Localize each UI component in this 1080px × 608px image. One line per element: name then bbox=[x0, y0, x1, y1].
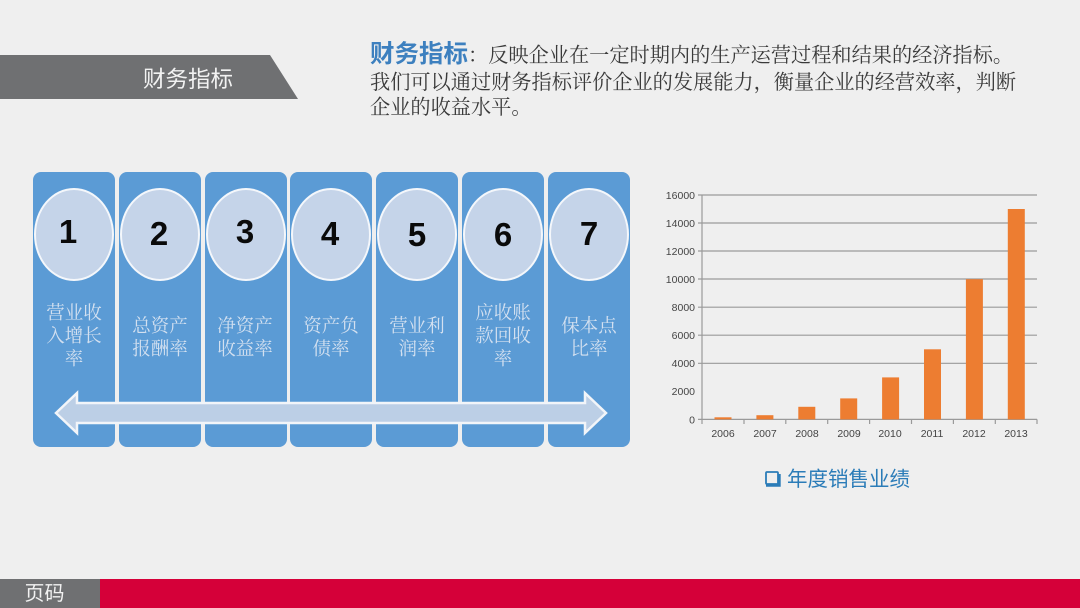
label 5: 营业利 bbox=[389, 317, 445, 337]
label 3 bbox=[217, 316, 273, 360]
icon: checkbox bullet bbox=[765, 471, 781, 487]
label 1 bbox=[46, 302, 102, 370]
bars bbox=[714, 209, 1025, 419]
footer bar bbox=[0, 579, 1080, 608]
y axis labels: 12000 bbox=[666, 246, 695, 258]
x axis labels: 2010 bbox=[878, 428, 902, 440]
label 7: 保本点 bbox=[561, 317, 617, 337]
number 6: 6 bbox=[494, 216, 512, 253]
number 4: 4 bbox=[321, 215, 339, 252]
circle 1 bbox=[34, 188, 114, 281]
x axis labels: 2009 bbox=[837, 428, 861, 440]
column 2 background bbox=[119, 172, 201, 447]
intro text block: 我们可以通过财务指标评价企业的发展能力，衡量企业的经营效率，判断 bbox=[370, 72, 1016, 94]
number 5: 5 bbox=[408, 216, 426, 253]
label 6: 应收账 bbox=[475, 304, 531, 324]
y axis labels: 2000 bbox=[672, 386, 695, 398]
y axis labels: 4000 bbox=[672, 358, 695, 370]
circle 2 bbox=[120, 188, 200, 281]
title banner bbox=[0, 55, 298, 99]
label 4: 债率 bbox=[312, 340, 350, 360]
label 6 bbox=[475, 302, 531, 370]
label 5: 润率 bbox=[398, 340, 436, 360]
column 4 background bbox=[290, 172, 372, 447]
panel: seven indicators bbox=[33, 172, 630, 447]
column 6 background bbox=[462, 172, 544, 447]
x axis labels: 2012 bbox=[962, 428, 986, 440]
label 1: 率 bbox=[65, 350, 83, 370]
y axis labels: 10000 bbox=[666, 274, 695, 286]
y axis labels bbox=[666, 190, 695, 426]
column 7 background bbox=[548, 172, 630, 447]
intro text block bbox=[370, 41, 1016, 119]
x axis labels: 2007 bbox=[753, 428, 777, 440]
number 2: 2 bbox=[150, 215, 168, 252]
x axis labels: 2011 bbox=[921, 428, 943, 440]
x axis labels bbox=[711, 428, 1028, 440]
x axis labels: 2008 bbox=[795, 428, 819, 440]
y axis labels: 14000 bbox=[666, 218, 695, 230]
column 1 background bbox=[33, 172, 115, 447]
label 7 bbox=[561, 316, 617, 360]
label 5 bbox=[389, 316, 445, 360]
label 6: 率 bbox=[494, 350, 512, 370]
intro text block: 财务指标：反映企业在一定时期内的生产运营过程和结果的经济指标。 bbox=[370, 41, 1013, 68]
label 7: 比率 bbox=[570, 340, 608, 360]
label 2 bbox=[132, 316, 188, 360]
circle 4 bbox=[291, 188, 371, 281]
label 4: 资产负 bbox=[303, 317, 359, 337]
label 2: 报酬率 bbox=[132, 340, 188, 360]
y axis labels: 6000 bbox=[672, 330, 695, 342]
label 3: 净资产 bbox=[217, 317, 273, 337]
label 4 bbox=[303, 316, 359, 360]
y axis labels: 16000 bbox=[666, 190, 695, 202]
label 1: 营业收 bbox=[46, 304, 102, 324]
column 3 background bbox=[205, 172, 287, 447]
circle 3 bbox=[206, 188, 286, 281]
caption text: 年度销售业绩 bbox=[787, 468, 910, 491]
circle 5 bbox=[377, 188, 457, 281]
y axis labels: 8000 bbox=[672, 302, 695, 314]
number 7: 7 bbox=[580, 215, 598, 252]
label 2: 总资产 bbox=[132, 317, 188, 337]
page number tab bbox=[0, 579, 100, 608]
chart caption bbox=[765, 468, 910, 491]
label 3: 收益率 bbox=[217, 340, 273, 360]
banner title text: 财务指标 bbox=[143, 67, 233, 92]
y axis labels: 0 bbox=[689, 414, 695, 426]
column 5 background bbox=[376, 172, 458, 447]
circle 6 bbox=[463, 188, 543, 281]
intro text block: 企业的收益水平。 bbox=[370, 97, 532, 119]
circle 7 bbox=[549, 188, 629, 281]
label 1: 入增长 bbox=[46, 327, 102, 347]
arrow: double-headed bbox=[54, 390, 608, 436]
x axis labels: 2013 bbox=[1004, 428, 1028, 440]
x axis labels: 2006 bbox=[711, 428, 735, 440]
bar chart: annual sales bbox=[666, 190, 1038, 440]
label 6: 款回收 bbox=[475, 327, 531, 347]
number 1: 1 bbox=[59, 213, 77, 250]
page number tab: 页码 bbox=[24, 583, 64, 605]
number 3: 3 bbox=[236, 213, 254, 250]
